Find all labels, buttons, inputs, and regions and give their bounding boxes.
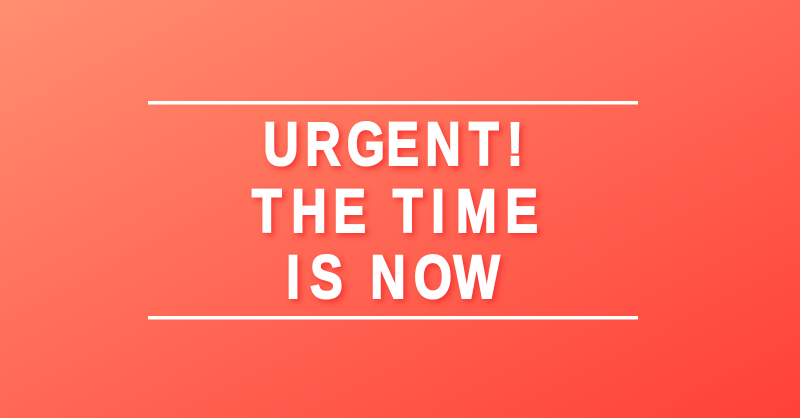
top rule xyxy=(148,101,638,104)
headline line 3: IS NOW xyxy=(286,243,500,311)
bottom rule xyxy=(148,316,638,320)
headline xyxy=(252,110,538,311)
headline line 1: URGENT! xyxy=(263,110,523,178)
headline line 2: THE TIME xyxy=(252,177,538,245)
